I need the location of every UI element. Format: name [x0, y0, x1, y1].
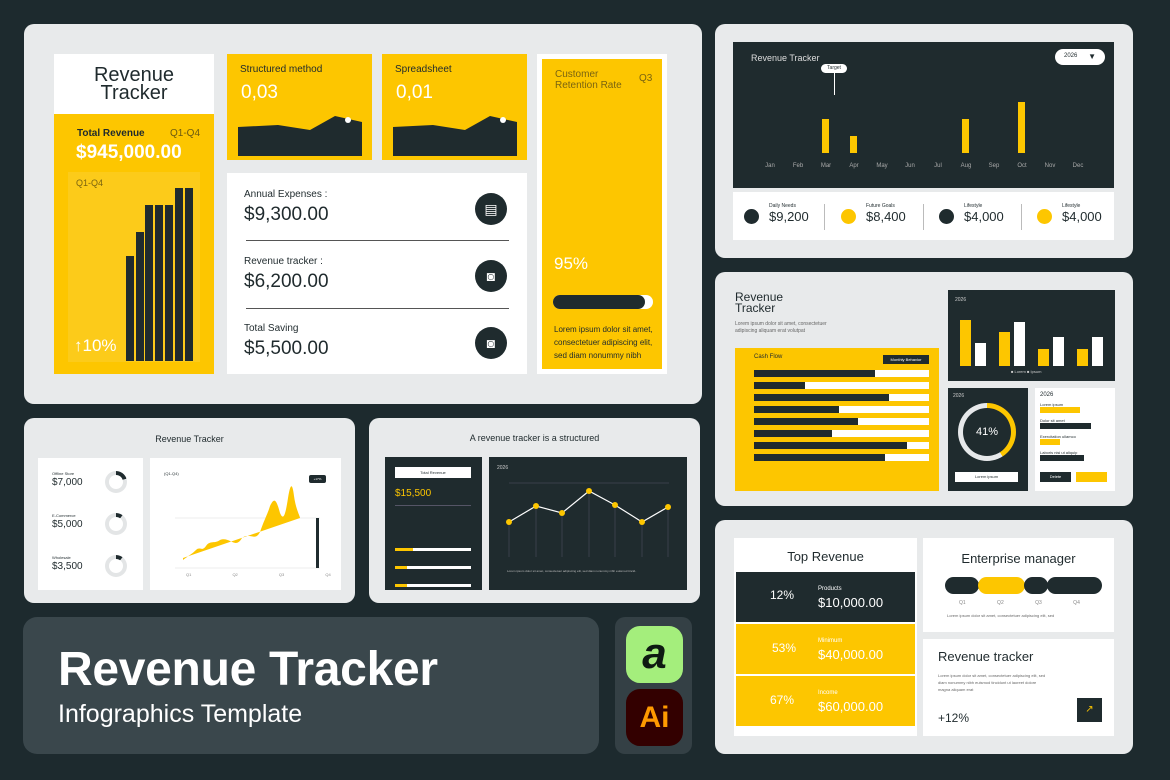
banner: title: Infographics Template [58, 700, 302, 728]
expenses list panel: $6,200.00 [244, 271, 329, 292]
total revenue card: Total Revenue [420, 470, 446, 475]
icon: Ai: Ai [640, 701, 670, 734]
icon: green a [626, 626, 683, 683]
top revenue table: $10,000.00 [818, 595, 883, 610]
top revenue table: Top Revenue [787, 549, 864, 564]
cash flow chart [735, 348, 939, 491]
dark bar chart: Apr [849, 163, 859, 169]
progress list: Lorem ipsum [1040, 402, 1063, 407]
customer retention panel: Customer Retention Rate [555, 69, 622, 91]
icons: app logos [615, 617, 692, 754]
stats strip: Lifestyle [1062, 203, 1080, 209]
heading [735, 290, 783, 315]
dark bar chart: 2026 [1064, 53, 1077, 59]
total revenue card: $15,500 [395, 488, 431, 499]
dark bar chart: Jul [934, 163, 942, 169]
stats strip: Daily Needs [769, 203, 796, 209]
stats strip: $8,400 [866, 209, 906, 224]
expenses list panel: $9,300.00 [244, 204, 329, 225]
total revenue panel: ↑10% [74, 336, 117, 355]
panel: cash flow dashboard: adipiscing aliquam erat volutpat [735, 328, 805, 334]
channel list: Wholesale [52, 555, 71, 560]
channel list: Offline Store [52, 471, 74, 476]
progress list: Laboris nisi ut aliquip [1040, 450, 1077, 455]
top revenue table: 53% [772, 641, 796, 655]
top revenue table [734, 538, 917, 736]
customer retention panel: Lorem ipsum dolor sit amet, consectetuer adipiscing elit, sed diam nonummy nibh [554, 325, 653, 360]
dark bar chart: Aug [961, 163, 971, 169]
dark bar chart [733, 42, 1114, 188]
enterprise manager: Lorem ipsum dolor sit amet, consectetuer adipiscing elit, sed [947, 613, 1054, 618]
progress list: 2026 [1040, 392, 1053, 398]
enterprise manager: Enterprise manager [961, 551, 1076, 566]
expenses list panel: Revenue tracker : [244, 256, 323, 267]
panel: cash flow dashboard: Lorem ipsum dolor sit amet, consectetuer [735, 321, 827, 327]
expenses list panel: Annual Expenses : [244, 189, 327, 200]
heading: Revenue [735, 290, 783, 304]
donut 41%: Lorem ipsum [975, 474, 998, 479]
dark bar chart: Revenue Tracker [751, 53, 820, 63]
dark bar chart: Oct [1017, 163, 1027, 169]
channel list: E-Commerce [52, 513, 76, 518]
title box: Revenue [94, 64, 174, 86]
banner: title [23, 617, 599, 754]
progress list [1035, 388, 1115, 491]
enterprise manager: Q1 Q2 Q3 Q4 [959, 600, 1080, 606]
channel list [38, 458, 143, 590]
top revenue table: Products [818, 586, 842, 592]
grouped bar chart: 2026 [955, 297, 966, 303]
area chart: Q1 Q2 Q3 Q4 [186, 572, 331, 577]
channel list: $7,000 [52, 477, 83, 488]
panel: revenue tracker channels: Revenue Tracker [155, 434, 224, 444]
panel: revenue tracker channels [24, 418, 355, 603]
title box [54, 54, 214, 114]
spreadsheet card: Spreadsheet [395, 64, 452, 75]
top revenue table: 12% [770, 588, 794, 602]
expenses list panel: $5,500.00 [244, 338, 329, 359]
expenses list panel [227, 173, 527, 374]
progress list: Delete [1050, 474, 1061, 479]
area chart [150, 458, 341, 590]
revenue tracker card: diam nonummy nibh euismod tincidunt ut laoreet dolore [938, 680, 1036, 685]
top revenue table: $60,000.00 [818, 699, 883, 714]
cash flow chart: Cash Flow [754, 354, 782, 360]
expenses list panel: Total Saving [244, 323, 298, 334]
spreadsheet card [382, 54, 527, 160]
dark bar chart: May [876, 163, 888, 169]
dark bar chart: Sep [989, 163, 999, 169]
channel list: $5,000 [52, 519, 83, 530]
stats strip: Lifestyle [964, 203, 982, 209]
expenses list panel: ◙ [487, 335, 495, 351]
progress list: Exercitation ullamco [1040, 434, 1076, 439]
dark bar chart: Nov [1045, 163, 1055, 169]
dark bar chart: Feb [793, 163, 803, 169]
dark bar chart: Mar [821, 163, 831, 169]
panel: cash flow dashboard [715, 272, 1133, 506]
icon: trend up: ↗ [1085, 704, 1094, 715]
panel: main revenue tracker dashboard [24, 24, 702, 404]
stats strip: $9,200 [769, 209, 809, 224]
stats strip: $4,000 [964, 209, 1004, 224]
customer retention panel: 95% [554, 254, 588, 273]
spreadsheet card: 0,01 [396, 82, 433, 103]
revenue tracker card [923, 639, 1114, 736]
revenue tracker card: Revenue tracker [938, 649, 1033, 664]
donut 41%: 2026 [953, 393, 964, 399]
cash flow chart: Monthly Behavior [891, 357, 921, 362]
top revenue table: 67% [770, 693, 794, 707]
total revenue panel: Q1-Q4 [170, 128, 200, 139]
title box: Tracker [100, 82, 168, 104]
line chart: Lorem ipsum dolor sit amet, consectetuer adipiscing elit, sed diam nonummy nibh euismod tincid- [507, 569, 636, 573]
customer retention panel [537, 54, 667, 374]
panel: top revenue [715, 520, 1133, 754]
structured method card: 0,03 [241, 82, 278, 103]
channel list: $3,500 [52, 561, 83, 572]
progress list: Dolor sit amet [1040, 418, 1065, 423]
top revenue table: Minimum [818, 638, 842, 644]
total revenue panel: Q1-Q4 [76, 178, 103, 188]
area chart: +17% [314, 477, 321, 481]
enterprise manager [923, 538, 1114, 632]
expenses list panel: ◙ [487, 268, 495, 284]
total revenue panel [54, 114, 214, 374]
top revenue table: $40,000.00 [818, 647, 883, 662]
dark bar chart: Dec [1073, 163, 1083, 169]
top revenue table: Income [818, 690, 838, 696]
stats strip: $4,000 [1062, 209, 1102, 224]
expenses list panel: ▤ [484, 201, 498, 217]
donut 41% [948, 388, 1028, 491]
customer retention panel: Q3 [639, 73, 652, 84]
stats strip [733, 192, 1114, 240]
dark bar chart: Jun [905, 163, 915, 169]
total revenue panel: Total Revenue [77, 128, 145, 139]
revenue tracker card: +12% [938, 711, 969, 725]
structured method card [227, 54, 372, 160]
dark bar chart: ▼ [1088, 52, 1096, 61]
icon: trend up [1077, 698, 1102, 722]
icon: Ai [626, 689, 683, 746]
line chart [489, 457, 687, 590]
heading: Tracker [735, 301, 775, 315]
panel: structured revenue tracker [369, 418, 700, 603]
revenue tracker card: Lorem ipsum dolor sit amet, consectetuer adipiscing elit, sed [938, 673, 1045, 678]
panel: structured revenue tracker: A revenue tracker is a structured [470, 433, 599, 443]
grouped bar chart [948, 290, 1115, 381]
revenue tracker card: magna aliquam erat [938, 687, 973, 692]
total revenue panel: $945,000.00 [76, 142, 182, 163]
grouped bar chart: ■ Lorem ■ Ipsum [1011, 369, 1041, 374]
structured method card: Structured method [240, 64, 322, 75]
area chart: (Q1-Q4) [164, 471, 179, 476]
line chart: 2026 [497, 465, 508, 471]
dark bar chart: Target [827, 65, 841, 71]
icon: green a: a [642, 629, 667, 678]
banner: title: Revenue Tracker [58, 643, 438, 696]
dark bar chart: Jan [765, 163, 775, 169]
bar chart [126, 188, 193, 361]
total revenue card [385, 457, 482, 590]
stats strip: Future Goals [866, 203, 895, 209]
donut 41%: 41% [976, 426, 998, 438]
panel: monthly revenue chart [715, 24, 1133, 258]
